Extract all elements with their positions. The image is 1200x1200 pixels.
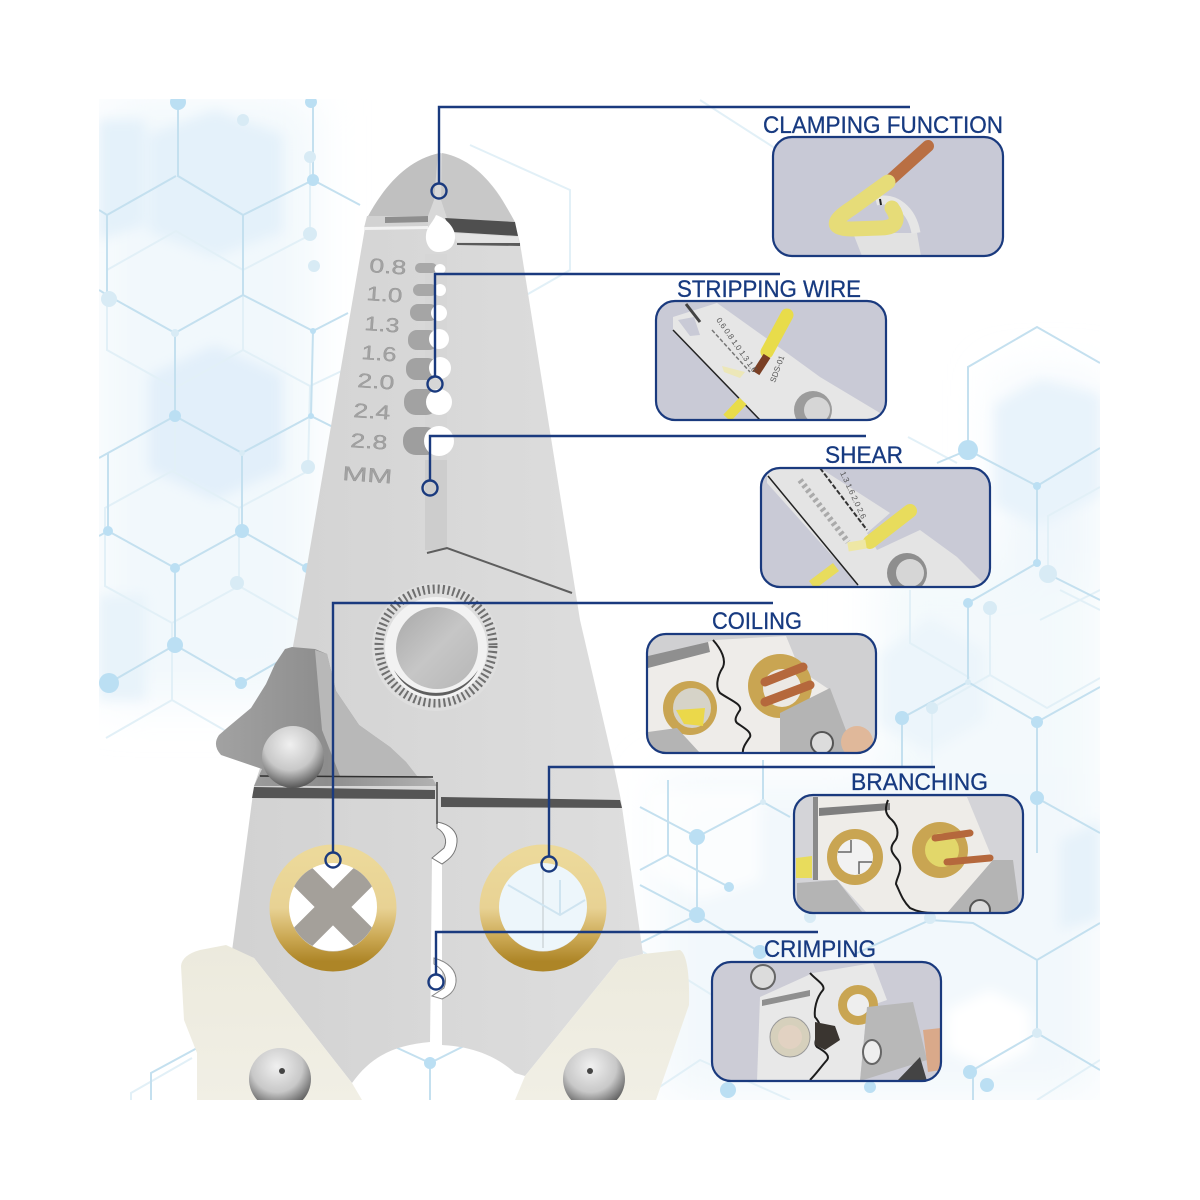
hex nodes bbox=[99, 94, 1057, 1098]
photo: wire stripped: 0.6 0.8 1.0 1.3 1.6 bbox=[714, 316, 759, 374]
heading: shear: SHEAR bbox=[825, 442, 903, 469]
infographic: plier functions bbox=[99, 99, 1100, 1100]
photo: wire stripped: SDS-01 bbox=[768, 354, 787, 384]
photo: wire coiled bbox=[647, 634, 876, 758]
callout: coiling bbox=[326, 603, 773, 868]
dark grooves across jaws bbox=[252, 787, 622, 808]
frame bbox=[647, 634, 876, 753]
frame bbox=[656, 301, 886, 420]
plier steel body bbox=[232, 153, 643, 1083]
gauge numbers: 2.0 bbox=[357, 370, 395, 395]
gauge numbers: 1.3 bbox=[364, 313, 400, 337]
frame bbox=[761, 468, 990, 587]
hex lines main layer bbox=[99, 102, 1100, 1100]
photo: terminal crimped bbox=[712, 962, 941, 1081]
callout lines and dots bbox=[326, 107, 935, 990]
callout: crimping bbox=[428, 932, 818, 990]
photo: wire clamped bbox=[773, 137, 1003, 256]
gauge numbers: MM bbox=[342, 463, 393, 488]
background: blue hexagon network bbox=[99, 94, 1100, 1100]
left grip rivet bbox=[249, 1048, 311, 1100]
stop lever bbox=[216, 647, 437, 786]
callout: clamping bbox=[432, 107, 910, 198]
gauge numbers bbox=[342, 255, 407, 488]
frame bbox=[712, 962, 941, 1081]
frame bbox=[773, 137, 1003, 256]
hex lines light layer bbox=[105, 100, 1100, 1100]
panel: stripping wire bbox=[656, 276, 886, 429]
jaw gap and notches bbox=[430, 782, 457, 1045]
brass eyelet open bbox=[490, 854, 596, 962]
left handle grip bbox=[181, 945, 362, 1100]
photo: wire sheared: 1.3 1.6 2.0 2.6 bbox=[838, 470, 868, 521]
panel: shear bbox=[761, 442, 990, 593]
callout: branching bbox=[542, 767, 935, 872]
lever rivet bbox=[262, 726, 324, 788]
blade shear edge bbox=[427, 548, 572, 593]
gauge numbers: 0.8 bbox=[369, 255, 407, 280]
photo: wire stripped bbox=[656, 301, 886, 429]
gauge numbers: 2.8 bbox=[350, 430, 388, 455]
panel: branching bbox=[794, 769, 1023, 920]
panel: crimping bbox=[712, 936, 941, 1081]
frame bbox=[794, 795, 1023, 913]
brass eyelet with cross bbox=[280, 854, 386, 962]
callout: stripping bbox=[428, 274, 780, 392]
gauge numbers: 1.6 bbox=[361, 342, 397, 366]
plier illustration bbox=[181, 153, 689, 1110]
panel: clamping function bbox=[763, 112, 1003, 256]
right handle grip bbox=[515, 950, 689, 1100]
callout: shear bbox=[422, 436, 866, 496]
gauge numbers: 2.4 bbox=[353, 400, 391, 425]
plier tip shading bbox=[364, 153, 520, 246]
heading: clamping function: CLAMPING FUNCTION bbox=[763, 112, 1003, 139]
photo: wire sheared bbox=[761, 468, 990, 593]
heading: crimping: CRIMPING bbox=[764, 936, 876, 963]
gauge numbers: 1.0 bbox=[366, 283, 403, 307]
panel: coiling bbox=[647, 608, 876, 758]
right grip rivet bbox=[563, 1048, 625, 1100]
photo: wire branching bbox=[794, 795, 1023, 920]
heading: stripping wire: STRIPPING WIRE bbox=[677, 276, 861, 303]
cutting holes and gauge notches bbox=[403, 215, 455, 550]
pivot bolt bbox=[372, 583, 500, 711]
heading: coiling: COILING bbox=[712, 608, 802, 635]
heading: branching: BRANCHING bbox=[851, 769, 988, 796]
